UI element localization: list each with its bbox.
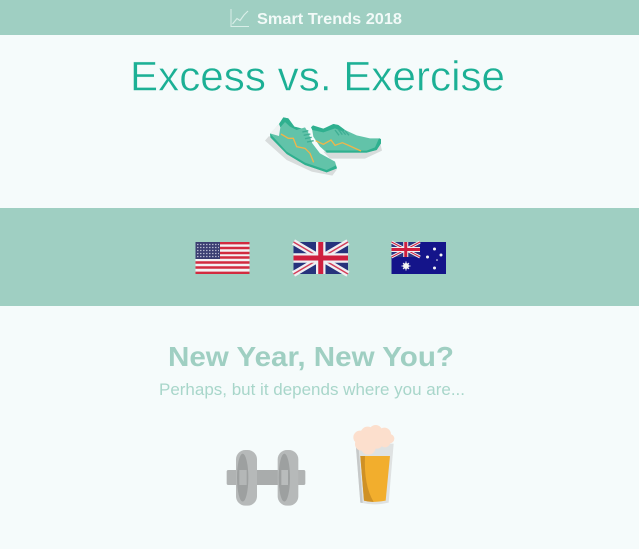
- icon: dumbbell: [227, 450, 305, 506]
- shoe shadows: [265, 136, 337, 176]
- flag: United Kingdom: [294, 242, 348, 274]
- header title: Smart Trends 2018: [257, 11, 402, 28]
- icon: beer glass: [353, 425, 394, 504]
- heading: New Year, New You?: [168, 341, 454, 372]
- flag: United States: [196, 242, 250, 274]
- right shoe: [311, 124, 381, 153]
- left shoe: [270, 117, 337, 172]
- glass: [356, 444, 394, 504]
- flag band: [0, 208, 639, 306]
- foam: [353, 425, 394, 455]
- main title: Excess vs. Exercise: [130, 52, 505, 100]
- subheading: Perhaps, but it depends where you are...: [159, 380, 465, 399]
- flag: Australia: [392, 242, 446, 274]
- header band: [0, 0, 639, 35]
- icon: line chart: [231, 9, 249, 26]
- beer: [360, 456, 390, 502]
- icon: running shoes: [265, 117, 382, 176]
